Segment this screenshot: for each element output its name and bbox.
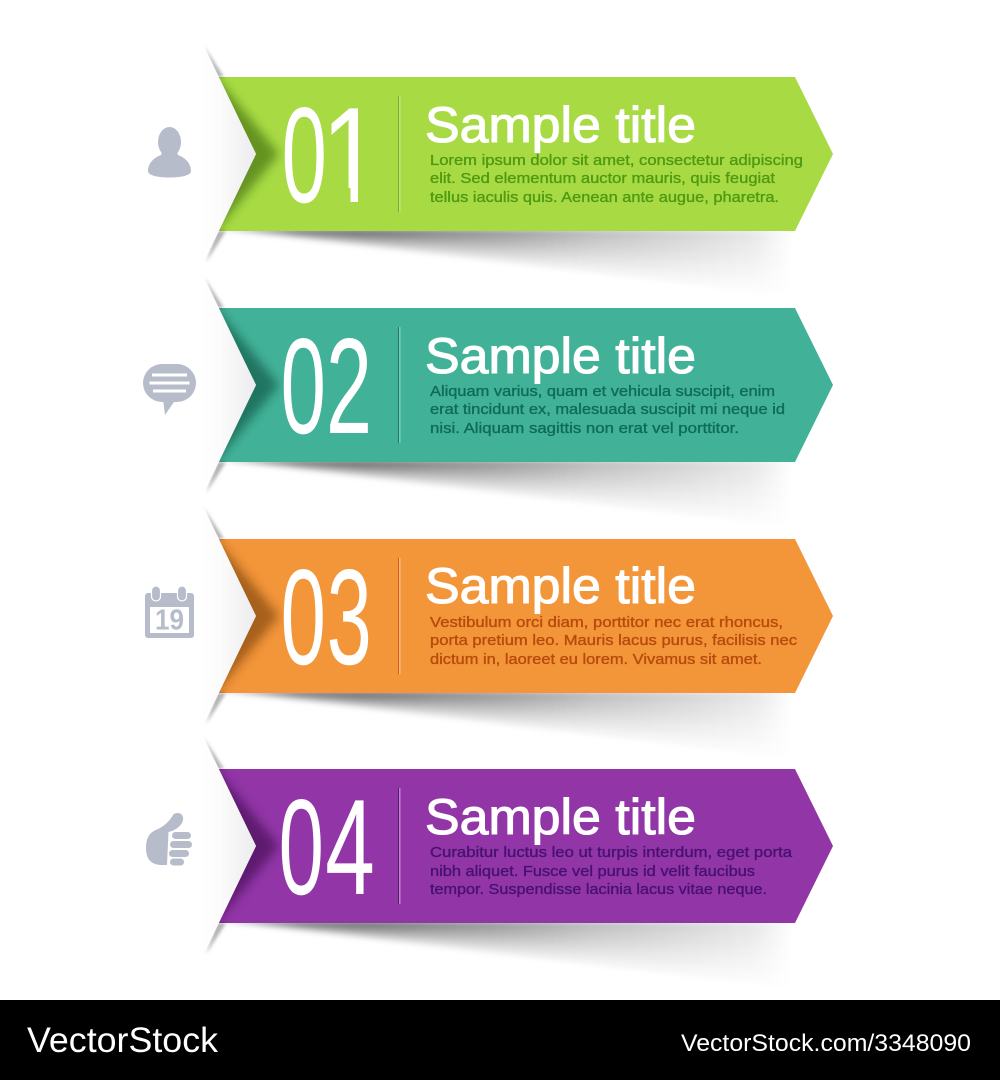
- arrow banner: step 04: [218, 769, 833, 923]
- footer logo text: VectorStock: [27, 1021, 219, 1060]
- icon: person: [148, 127, 191, 178]
- drop shadow: step 04: [218, 921, 793, 987]
- icon: thumbs up: [146, 813, 192, 866]
- text block: step 01: tellus iaculis quis. Aenean ante augue, pharetra.: [430, 190, 779, 206]
- text block: step 04: tempor. Suspendisse lacinia lacus vitae neque.: [430, 882, 767, 898]
- heading: step 04: Sample title: [425, 789, 696, 845]
- flap edge shadows: step 02: [204, 277, 226, 493]
- white folded flap: step 03: [130, 504, 256, 728]
- number: 02: 2: [326, 310, 372, 462]
- text block: step 03: Vestibulum orci diam, porttitor nec erat rhoncus,: [430, 615, 783, 631]
- heading: step 03: Sample title: [425, 558, 696, 614]
- heading: step 02: Sample title: [425, 328, 696, 384]
- drop shadow: step 01: [218, 229, 793, 295]
- number: 03: 0: [281, 541, 326, 693]
- text block: step 02: erat tincidunt ex, malesuada suscipit mi neque id: [430, 402, 785, 418]
- number: 01: 0: [282, 79, 327, 231]
- white folded flap: step 04: [130, 734, 256, 958]
- icon: calendar: [145, 586, 194, 638]
- number: 02: 0: [281, 310, 326, 462]
- white folded flap: step 02: [130, 273, 256, 497]
- flap edge shadows: step 04: [204, 738, 226, 954]
- arrow banner: step 03: [218, 539, 833, 693]
- arrow banner: step 02: [218, 308, 833, 462]
- drop shadow: step 02: [218, 460, 793, 526]
- text block: step 04: [430, 845, 793, 898]
- flap edge shadows: step 01: [204, 46, 226, 262]
- footer image id text: VectorStock.com/3348090: [681, 1030, 971, 1057]
- number: 01: [284, 107, 358, 204]
- number: 04: 0: [279, 771, 324, 923]
- icon: speech bubble: [143, 364, 196, 415]
- text block: step 03: [430, 615, 797, 668]
- arrow banner: step 01: [218, 77, 833, 231]
- text block: step 02: Aliquam varius, quam et vehicula suscipit, enim: [430, 384, 775, 400]
- text block: step 03: porta pretium leo. Mauris lacus purus, facilisis nec: [430, 633, 797, 649]
- divider: step 03: [398, 558, 400, 674]
- number: 01: 1: [321, 79, 382, 231]
- text block: step 04: nibh aliquet. Fusce vel purus id velit faucibus: [430, 864, 755, 880]
- divider: step 04: [398, 788, 400, 904]
- heading: step 01: Sample title: [425, 97, 696, 153]
- text block: step 01: [430, 153, 803, 206]
- white folded flap: step 01: [130, 42, 256, 266]
- icon: calendar: 19: [155, 604, 184, 636]
- panel: step 02 teal arrow banner: [143, 279, 833, 510]
- drop shadow: step 03: [218, 691, 793, 757]
- notch shadow: step 01: [219, 77, 282, 231]
- text block: step 01: elit. Sed elementum auctor mauris, quis feugiat: [430, 171, 775, 187]
- text block: step 04: Curabitur luctus leo ut turpis interdum, eget porta: [430, 845, 793, 861]
- footer bar: [0, 1000, 1000, 1080]
- flap edge shadows: step 03: [204, 508, 226, 724]
- notch shadow: step 02: [219, 308, 282, 462]
- panel: step 03 orange arrow banner: [145, 510, 833, 740]
- text block: step 02: [430, 384, 785, 437]
- notch shadow: step 04: [219, 769, 282, 923]
- text block: step 03: dictum in, laoreet eu lorem. Vivamus sit amet.: [430, 652, 762, 668]
- number: 03: 3: [327, 541, 372, 693]
- text block: step 02: nisi. Aliquam sagittis non erat vel porttitor.: [430, 421, 739, 437]
- panel: step 01 green arrow banner: [148, 48, 833, 278]
- divider: step 01: [398, 96, 400, 212]
- notch shadow: step 03: [219, 539, 282, 693]
- divider: step 02: [398, 327, 400, 443]
- text block: step 01: Lorem ipsum dolor sit amet, consectetur adipiscing: [430, 153, 803, 169]
- panel: step 04 purple arrow banner: [146, 740, 833, 970]
- number: 04: 4: [325, 771, 375, 923]
